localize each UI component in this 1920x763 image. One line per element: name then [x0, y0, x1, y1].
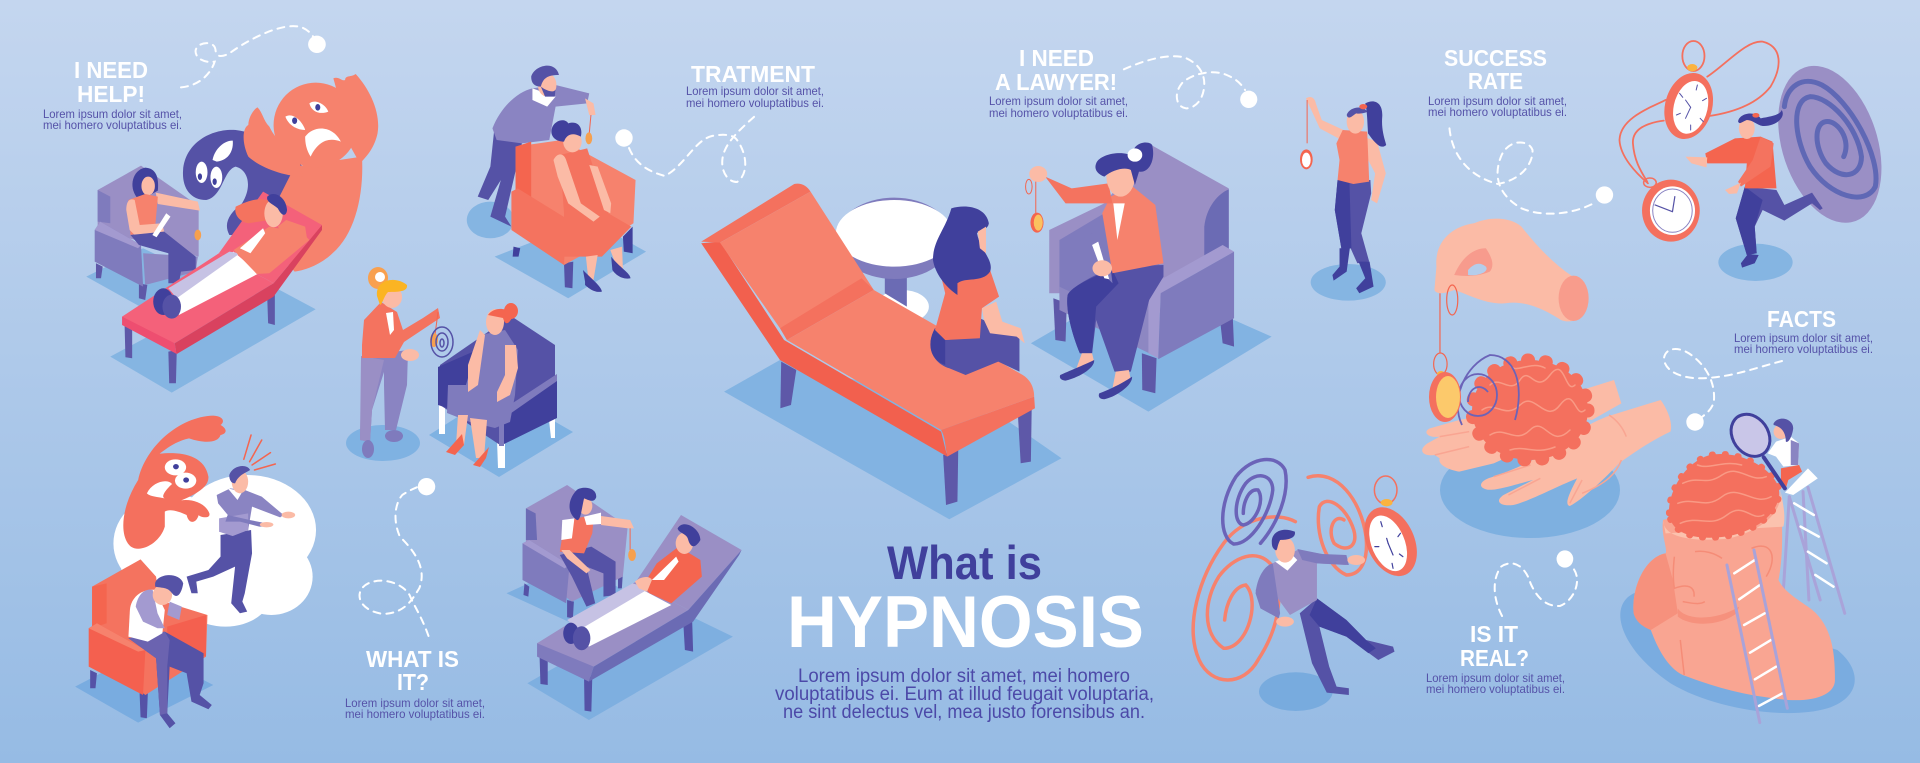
couch legs: [780, 362, 1032, 505]
text block: is it real: Lorem ipsum dolor sit amet,: [1426, 671, 1565, 685]
lower pocket watch: [1642, 178, 1700, 242]
intro paragraph: voluptatibus ei. Eum at illud feugait voluptaria,: [775, 684, 1154, 705]
coral monster: [123, 416, 226, 549]
therapist: [1026, 142, 1163, 399]
lower hands: [1422, 380, 1671, 506]
text block: I need a lawyer: A LAWYER!: [995, 69, 1117, 95]
text block: I need help: Lorem ipsum dolor sit amet,: [43, 107, 182, 121]
orange couch: [701, 184, 1035, 457]
scene: woman running from clocks and spiral: [1619, 41, 1898, 281]
couch: [122, 192, 322, 383]
running woman: [1686, 110, 1823, 268]
coral spirals: [1193, 476, 1367, 680]
text block: facts: [1734, 306, 1873, 356]
dashed route: I need help: [181, 26, 326, 87]
dashed route: is it real: [1495, 550, 1577, 616]
dashed route: lawyer: [1124, 56, 1257, 108]
text block: treatment: Lorem ipsum dolor sit amet,: [686, 84, 824, 98]
title: [787, 536, 1144, 663]
bust: [1633, 487, 1835, 700]
text block: I need help: HELP!: [77, 81, 145, 107]
scene: man hypnotising woman in coral armchair: [467, 66, 646, 298]
intro paragraph: [775, 666, 1154, 723]
scene: woman with pendulum and seated woman in indigo chair: [346, 267, 573, 477]
text block: treatment: TRATMENT: [691, 61, 815, 87]
exposed brain: [1669, 454, 1779, 538]
ghost: purple: [183, 130, 307, 237]
armchair: [1049, 145, 1234, 393]
cloud: [113, 475, 316, 627]
brain: [1472, 360, 1588, 460]
text block: what is it: IT?: [397, 669, 429, 695]
orange armchair: [89, 559, 207, 718]
title: What is: [887, 536, 1042, 589]
text block: is it real: mei homero voluptatibus ei.: [1426, 682, 1565, 696]
scene: man falling among spirals and clock: [1193, 459, 1425, 711]
back ladder: [1783, 487, 1845, 613]
chains: [1619, 41, 1779, 183]
text block: facts: FACTS: [1767, 306, 1836, 332]
text block: what is it: WHAT IS: [366, 646, 459, 672]
scene: standing woman with pocket watch: [1300, 97, 1386, 301]
front ladder: [1727, 550, 1787, 723]
spiral disc: [1761, 57, 1898, 231]
upper pocket watch: [1658, 64, 1719, 142]
text block: what is it: [345, 646, 485, 721]
scene: central couch, table, client and therapist: [701, 142, 1272, 519]
dashed route: treatment: [615, 116, 755, 182]
hypnotist: [478, 66, 596, 227]
text block: what is it: Lorem ipsum dolor sit amet,: [345, 696, 485, 710]
text block: success rate: Lorem ipsum dolor sit amet,: [1428, 94, 1567, 108]
text block: treatment: mei homero voluptatibus ei.: [686, 96, 824, 110]
ghost: coral: [244, 74, 378, 272]
text block: is it real: REAL?: [1460, 645, 1529, 671]
purple couch: [537, 515, 742, 712]
coral armchair: [511, 140, 636, 288]
intro paragraph: ne sint delectus vel, mea justo forensibus an.: [783, 702, 1145, 723]
text block: I need help: mei homero voluptatibus ei.: [43, 118, 182, 132]
text block: success rate: [1428, 45, 1567, 119]
seated woman: [551, 120, 631, 292]
text block: I need help: [43, 57, 182, 132]
text block: I need a lawyer: [989, 45, 1128, 120]
text block: is it real: [1426, 621, 1565, 696]
text block: I need a lawyer: mei homero voluptatibus ei.: [989, 106, 1128, 120]
dashed route: what is it: [360, 478, 435, 636]
text block: success rate: SUCCESS: [1444, 45, 1547, 71]
scene: patient on pink couch with ghosts: [86, 74, 378, 393]
intro paragraph: Lorem ipsum dolor sit amet, mei homero: [798, 666, 1130, 687]
text block: facts: Lorem ipsum dolor sit amet,: [1734, 331, 1873, 345]
indigo armchair: [438, 316, 557, 468]
therapist: [560, 488, 636, 607]
text block: I need a lawyer: I NEED: [1019, 45, 1094, 71]
patient: [563, 524, 702, 650]
seated woman: [446, 303, 518, 467]
purple spiral: [1223, 459, 1286, 544]
text block: facts: mei homero voluptatibus ei.: [1734, 342, 1873, 356]
hypnotic rings: [1458, 355, 1519, 425]
text block: what is it: mei homero voluptatibus ei.: [345, 707, 485, 721]
text block: is it real: IS IT: [1470, 621, 1518, 647]
patient: [153, 194, 309, 319]
purple armchair: [523, 485, 628, 618]
scene: frightened man and coral monster on white cloud: [75, 416, 316, 728]
round table: [836, 198, 953, 323]
seated man with head in hands: [128, 575, 212, 728]
text block: I need a lawyer: Lorem ipsum dolor sit amet,: [989, 94, 1128, 108]
text block: I need help: I NEED: [74, 57, 148, 83]
tiny researcher with magnifier: [1726, 412, 1802, 488]
man: [1256, 530, 1395, 695]
clock: [1356, 476, 1425, 579]
scene: head bust with brain, ladders and tiny researcher: [1620, 412, 1855, 723]
dashed route: success rate: [1449, 128, 1613, 214]
title: HYPNOSIS: [787, 582, 1144, 663]
dashed route: facts: [1664, 349, 1782, 431]
running man: [187, 466, 295, 613]
armchair: [95, 166, 199, 300]
scene: hand with pendulum over brain in hands: [1422, 219, 1671, 538]
standing woman: [360, 267, 453, 458]
text block: success rate: mei homero voluptatibus ei.: [1428, 105, 1567, 119]
scene: therapist and patient on purple couch: [507, 485, 742, 720]
upper hand: [1434, 219, 1589, 375]
text block: success rate: RATE: [1468, 68, 1523, 94]
seated client: [930, 206, 1025, 375]
therapist: [126, 168, 201, 283]
text block: treatment: [686, 61, 824, 110]
surprise lines: [244, 435, 275, 470]
golden pendulum watch: [1429, 371, 1461, 422]
